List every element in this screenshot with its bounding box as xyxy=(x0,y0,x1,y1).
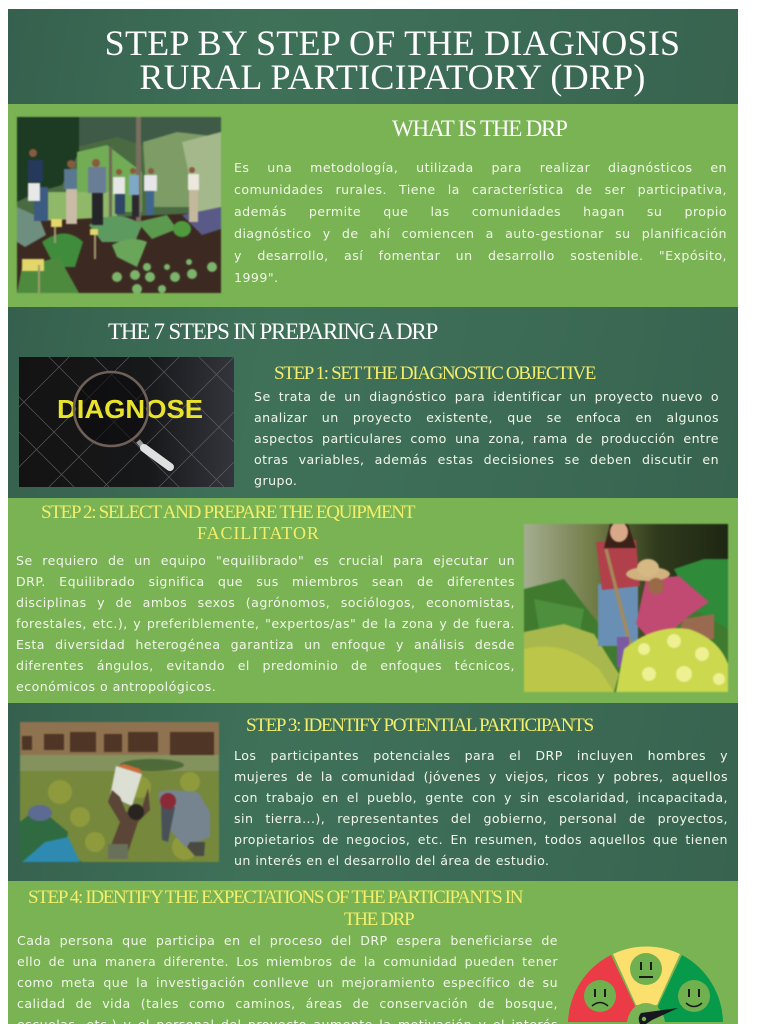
text: step 1 xyxy=(254,389,719,488)
man bending xyxy=(158,790,210,847)
title: STEP BY STEP OF THE DIAGNOSIS xyxy=(105,23,680,63)
heading: step 2 xyxy=(41,502,416,543)
text: step 1: Se trata de un diagnóstico para identificar un proyecto nuevo o xyxy=(254,389,719,404)
heading: step 2: FACILITATOR xyxy=(197,523,320,543)
text: step 4: Cada persona que participa en el proceso del DRP espera beneficiarse de xyxy=(17,933,558,948)
plants xyxy=(17,207,46,247)
foliage xyxy=(616,628,728,692)
photo: diagnose magnifying glass xyxy=(19,357,234,487)
photo: family harvesting in a field xyxy=(19,721,220,863)
text: step 2: DRP. Equilibrado significa que sus miembros sean de diferentes xyxy=(16,574,515,589)
gauge segment: red xyxy=(568,955,635,1022)
heading: step 4 xyxy=(28,887,524,930)
panel: step 2 xyxy=(8,498,738,703)
text: step 1: aspectos particulares como una zona, rama de producción entre xyxy=(254,431,719,446)
title xyxy=(105,23,680,97)
gauge hub xyxy=(627,1003,665,1024)
text: step 1: analizar un proyecto existente, que se enfoca en algunos xyxy=(254,410,719,425)
text: step 2: económicos o antropológicos. xyxy=(16,679,216,694)
text: what is the DRP: 1999". xyxy=(234,270,279,285)
gauge segment: green xyxy=(658,955,723,1022)
text: step 4: como meta que la investigación conlleve un mejoramiento específico de su xyxy=(17,975,558,990)
text: step 1: grupo. xyxy=(254,473,297,488)
heading: step 4: THE DRP xyxy=(344,909,413,930)
photo: farmers working in a garden xyxy=(523,523,729,693)
text: step 3: sin tierra...), representantes del gobierno, personal de proyectos, xyxy=(234,811,728,826)
text: step 3 xyxy=(234,748,728,868)
text: step 3: propietarios de negocios, etc. En resumen, todos aquellos que tienen xyxy=(234,832,728,847)
icon: satisfaction gauge with faces xyxy=(568,946,723,1024)
text: what is the DRP: Es una metodología, utilizada para realizar diagnósticos en xyxy=(234,160,727,175)
heading: step 4: STEP 4: IDENTIFY THE EXPECTATIONS OF THE PARTICIPANTS IN xyxy=(28,887,522,908)
people xyxy=(28,160,43,182)
text: step 4 xyxy=(17,933,558,1024)
heading: step 2: STEP 2: SELECT AND PREPARE THE EQUIPMENT xyxy=(41,502,414,523)
text: step 2: Esta diversidad heterogénea garantiza un enfoque y análisis desde xyxy=(16,637,515,652)
gauge segment: yellow xyxy=(613,946,680,1005)
text: step 3: mujeres de la comunidad (jóvenes y viejos, ricos y pobres, aquellos xyxy=(234,769,728,784)
text: step 4: calidad de vida (tales como caminos, áreas de conservación de bosque, xyxy=(17,996,558,1011)
photo: diagnose magnifying glass: DIAGNOSE xyxy=(57,394,203,424)
gauge needle xyxy=(639,1008,678,1024)
panel: step 4 xyxy=(8,881,738,1024)
photo: people in a vegetable garden xyxy=(16,116,222,294)
child with bucket xyxy=(110,766,142,806)
text: what is the DRP: comunidades rurales. Tiene la característica de ser participativa, xyxy=(234,182,727,197)
text: step 2: diferentes ángulos, evitando el predominio de enfoques técnicos, xyxy=(16,658,515,673)
icon: sad face xyxy=(584,980,616,1012)
panel: what is the DRP xyxy=(8,104,738,307)
woman crouching xyxy=(20,814,82,862)
panel: title banner xyxy=(8,9,738,104)
text: step 3: con trabajo en el pueblo, gente con y sin escolaridad, incapacitada, xyxy=(234,790,728,805)
heading: what is the DRP: WHAT IS THE DRP xyxy=(392,116,567,141)
title: RURAL PARTICIPATORY (DRP) xyxy=(139,57,646,97)
text: step 1: otras variables, además estas decisiones se deben discutir en xyxy=(254,452,719,467)
text: what is the DRP: y desarrollo, así fomentar un desarrollo sostenible. "Expósito, xyxy=(234,248,727,263)
panel: step 3 xyxy=(8,703,738,881)
text: step 2: forestales, etc.), y preferiblemente, "expertos/as" de la zona y de fuera. xyxy=(16,616,515,631)
icon: happy face xyxy=(678,980,710,1012)
man xyxy=(636,576,709,639)
heading: the 7 steps: THE 7 STEPS IN PREPARING A DRP xyxy=(108,319,437,344)
text: step 3: un interés en el desarrollo del área de estudio. xyxy=(234,853,550,868)
icon: neutral face xyxy=(630,953,662,985)
text: step 2: disciplinas y de ambos sexos (agrónomos, sociólogos, economistas, xyxy=(16,595,515,610)
woman xyxy=(598,584,638,646)
text: step 2 xyxy=(16,553,515,694)
heading: step 1: STEP 1: SET THE DIAGNOSTIC OBJECTIVE xyxy=(274,362,595,384)
text: step 2: Se requiero de un equipo "equilibrado" es crucial para ejecutar un xyxy=(16,553,515,568)
text: what is the DRP: además permite que las comunidades hagan su propio xyxy=(234,204,727,219)
text: what is the DRP xyxy=(234,160,727,285)
panel: the 7 steps and step 1 xyxy=(8,307,738,498)
text: step 4: ello de una manera diferente. Los miembros de la comunidad pueden tener xyxy=(17,954,558,969)
heading: step 3: STEP 3: IDENTIFY POTENTIAL PARTICIPANTS xyxy=(246,714,593,736)
text: step 3: Los participantes potenciales para el DRP incluyen hombres y xyxy=(234,748,728,763)
text: what is the DRP: diagnóstico y de ahí comiencen a auto-gestionar su planificación xyxy=(234,226,727,241)
